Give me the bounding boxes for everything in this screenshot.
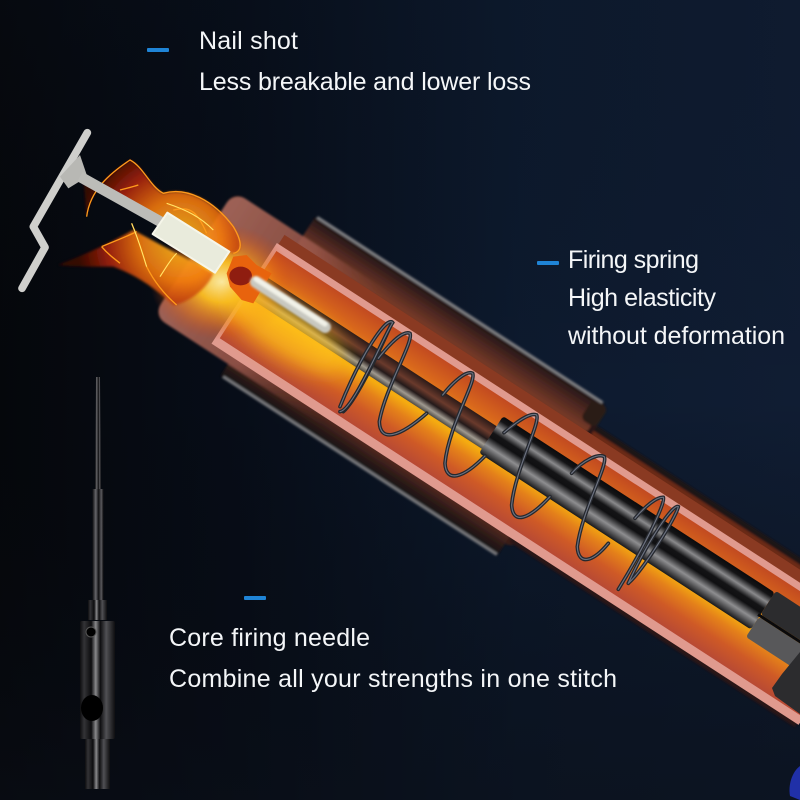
thin rod section (245, 273, 503, 453)
needle collar (88, 600, 107, 620)
marker dash: core firing needle (244, 596, 266, 600)
text: firing spring benefit line 2: without deformation (567, 322, 785, 350)
orange heated chamber (220, 251, 800, 720)
tool body cross-section (145, 170, 800, 746)
needle small hole (86, 627, 96, 637)
end collar (744, 590, 800, 686)
outer casing (145, 170, 800, 743)
flames (58, 160, 240, 305)
needle thin tip (95, 377, 101, 489)
nail flare (60, 155, 87, 188)
core firing needle (80, 377, 115, 789)
nail shot (22, 133, 229, 288)
inner pink wall (211, 243, 800, 725)
dark end fitting (772, 652, 800, 714)
text: core firing needle benefit: Combine all your strengths in one stitch (169, 665, 617, 693)
nail head wire (22, 133, 87, 288)
blue corner mark (789, 766, 800, 800)
burst at needle tip (227, 255, 272, 303)
marker dash: firing spring (537, 261, 559, 265)
thick rod section (479, 416, 775, 629)
needle hole (81, 695, 103, 721)
inner sleeve brown band (277, 235, 800, 628)
heading: core firing needle: Core firing needle (169, 624, 370, 652)
spring (340, 322, 678, 589)
heading: nail shot: Nail shot (199, 27, 298, 55)
needle lower shank (85, 739, 110, 789)
marker dash: nail shot (147, 48, 169, 52)
firing needle tip (256, 279, 325, 327)
needle mid section (92, 489, 104, 600)
needle barrel (80, 621, 115, 739)
text: firing spring benefit line 1: High elasticity (568, 284, 716, 312)
nail shaft (80, 177, 163, 223)
text: nail shot benefit: Less breakable and lower loss (199, 68, 531, 96)
heading: firing spring: Firing spring (568, 246, 699, 274)
nail barrel (153, 213, 229, 273)
hot glow (150, 224, 358, 390)
